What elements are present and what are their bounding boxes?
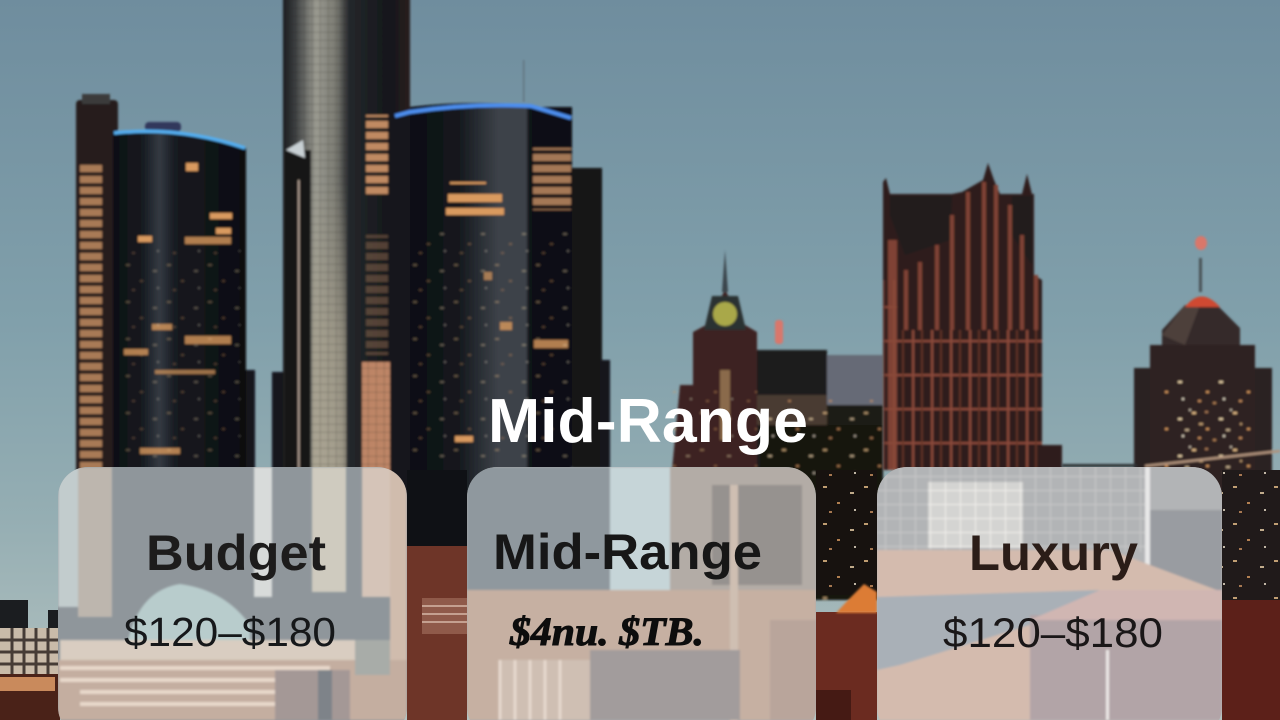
price: Luxury: $120–$180 xyxy=(943,609,1163,656)
card: Mid-Range xyxy=(467,467,816,720)
card background xyxy=(467,467,816,720)
card: Luxury xyxy=(877,467,1222,720)
skyline left: Renaissance Center towers xyxy=(76,0,610,612)
label: Budget: Budget xyxy=(146,525,326,581)
card background xyxy=(877,467,1222,720)
price: Mid-Range (distorted): $4nu. $TB. xyxy=(509,609,704,654)
skyline right: gothic brick tower xyxy=(883,163,1062,470)
skyline right: dome tower xyxy=(1062,236,1280,608)
card: Budget xyxy=(58,467,407,720)
skyline right: church tower and dark blocks xyxy=(672,250,883,600)
price: Budget: $120–$180 xyxy=(124,609,336,655)
label: Luxury: Luxury xyxy=(969,525,1138,581)
card background xyxy=(58,467,407,720)
ground buildings and riverfront xyxy=(0,470,1280,720)
heading: Mid-Range: Mid-Range xyxy=(488,387,808,456)
label: Mid-Range: Mid-Range xyxy=(493,524,762,580)
